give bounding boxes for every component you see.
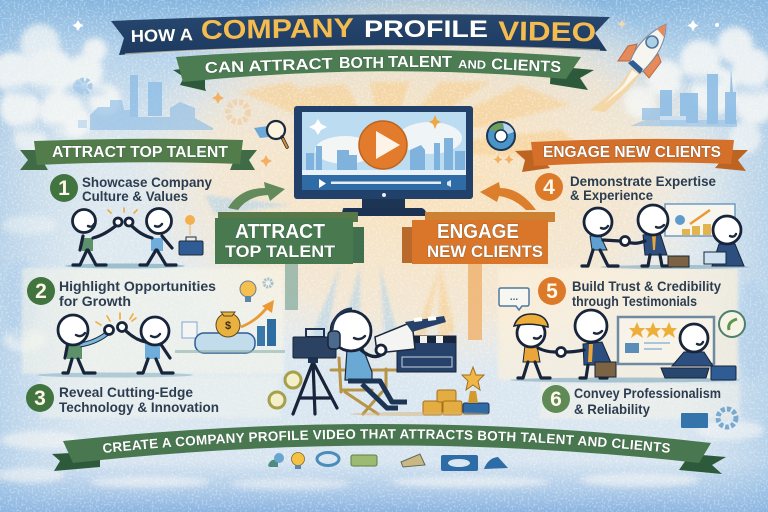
figures shaking hands at chart board — [582, 204, 750, 269]
number badge 6 — [542, 385, 570, 413]
number badge 6: 6 — [550, 388, 562, 411]
clapperboard — [397, 336, 456, 372]
step 2 text: Highlight Opportunities — [59, 278, 216, 294]
icon: rocket — [590, 24, 666, 112]
director's chair — [331, 358, 397, 414]
title banner: COMPANY — [201, 13, 354, 45]
step 3 text: Reveal Cutting-Edge — [59, 384, 193, 400]
bottom banner — [52, 424, 726, 474]
step 5 text: through Testimonials — [572, 293, 697, 309]
number badge 4: 4 — [543, 176, 555, 199]
signpost: attract top talent: TOP TALENT — [225, 242, 336, 261]
subtitle banner: AND — [458, 57, 487, 72]
number badge 2 — [27, 277, 55, 305]
title banner: PROFILE — [364, 16, 488, 43]
subtitle banner: BOTH — [339, 55, 384, 72]
megaphone — [375, 316, 446, 355]
step 5 text: Build Trust & Credibility — [572, 278, 721, 294]
title banner: VIDEO — [498, 16, 596, 47]
number badge 5: 5 — [546, 280, 558, 303]
step 5: build trust — [499, 277, 745, 382]
icon: speech bubble — [499, 288, 529, 310]
icon: briefcase and bulb — [179, 215, 203, 255]
chart: growth with money bag: $ — [225, 320, 231, 332]
light rays behind monitor — [205, 82, 600, 350]
director with camera, megaphone and clapperboard — [293, 309, 456, 414]
step 1 text: Showcase Company — [82, 174, 212, 190]
figures high five — [37, 313, 193, 378]
decorative sparkles and icons upper area — [72, 20, 719, 167]
arrow: to monitor from talent — [228, 182, 285, 210]
ribbon: engage new clients — [515, 139, 748, 172]
step 1: showcase company culture — [50, 174, 212, 268]
step 3 text: Technology & Innovation — [59, 399, 219, 415]
step 2 text: for Growth — [59, 293, 131, 309]
signpost: attract top talent: ATTRACT — [235, 221, 325, 243]
ribbon: attract top talent — [20, 139, 257, 170]
step 4 text: Demonstrate Expertise — [570, 173, 716, 189]
step 4 text: & Experience — [570, 187, 653, 203]
number badge 2: 2 — [35, 280, 47, 303]
video camera on tripod — [293, 329, 337, 414]
step 1 text: Culture & Values — [82, 188, 188, 204]
number badge 3: 3 — [34, 387, 46, 410]
step 6 text: Convey Professionalism — [574, 385, 721, 401]
title banner: HOW A — [131, 25, 193, 46]
title banner — [111, 13, 610, 55]
coins and trophy — [269, 367, 490, 416]
step 2: highlight opportunities — [27, 277, 285, 378]
step 3: reveal technology — [26, 384, 219, 415]
cloud shading — [2, 75, 768, 380]
figures with testimonial screen — [510, 310, 745, 382]
subtitle banner: CAN ATTRACT — [205, 56, 334, 77]
figures high five — [65, 208, 185, 268]
monitor with play button — [294, 106, 473, 216]
icon: pie chart — [487, 122, 515, 150]
left skyline — [73, 75, 213, 130]
section backdrops — [22, 268, 740, 419]
subtitle banner — [173, 50, 594, 91]
arrow: to monitor from clients — [480, 182, 536, 210]
icon: magnifying glass — [254, 121, 287, 147]
signpost: engage new clients: NEW CLIENTS — [427, 242, 543, 261]
number badge 1: 1 — [58, 177, 70, 200]
signpost: engage new clients: ENGAGE — [437, 221, 519, 243]
chart: growth with money bag — [175, 279, 285, 353]
icon: speech bubble: ... — [510, 292, 518, 303]
ribbon: engage new clients: ENGAGE NEW CLIENTS — [543, 144, 721, 161]
signpost: attract top talent — [215, 212, 364, 310]
step 6 text: & Reliability — [574, 401, 650, 417]
step 6: convey professionalism — [542, 385, 736, 428]
ribbon: attract top talent: ATTRACT TOP TALENT — [52, 144, 229, 161]
subtitle banner: CLIENTS — [491, 56, 562, 76]
step 4: demonstrate expertise — [535, 173, 750, 269]
number badge 4 — [535, 173, 563, 201]
right skyline — [630, 68, 737, 127]
signpost: engage new clients — [402, 212, 555, 340]
number badge 3 — [26, 384, 54, 412]
row of small icons under banner — [268, 452, 508, 471]
director figure — [328, 309, 407, 408]
icons: panel and gear — [681, 409, 736, 428]
bottom banner: CREATE A COMPANY PROFILE VIDEO THAT ATTRACTS BOTH TALENT AND CLIENTS — [102, 429, 670, 453]
number badge 1 — [50, 174, 78, 202]
number badge 5 — [538, 277, 566, 305]
subtitle banner: TALENT — [388, 54, 453, 71]
